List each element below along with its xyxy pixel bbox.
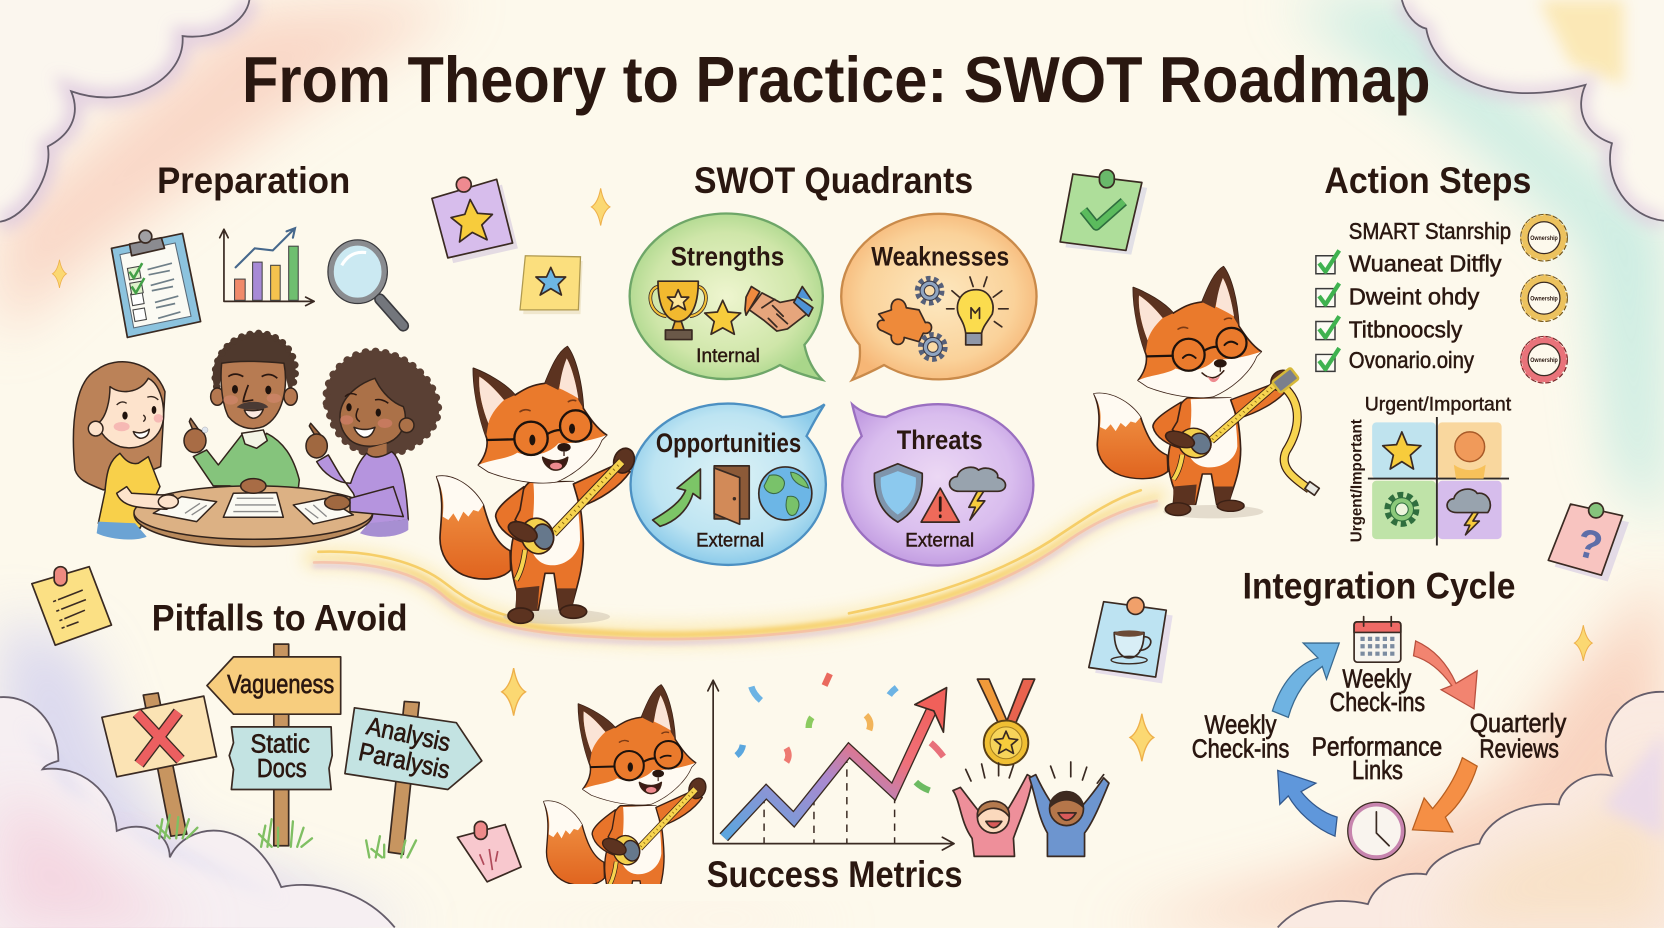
heading: swot quadrants: SWOT Quadrants bbox=[694, 159, 973, 201]
icon: star bbox=[705, 300, 741, 334]
badge: red bbox=[1521, 336, 1567, 383]
panel: preparation bbox=[73, 159, 438, 547]
icon: bar chart bbox=[220, 228, 314, 306]
icon: trophy bbox=[650, 281, 706, 340]
signpost: vagueness and static docs bbox=[207, 644, 341, 847]
panel: strengths bubble bbox=[630, 214, 823, 380]
person: girl bbox=[73, 362, 165, 540]
label: quarterly reviews: Reviews bbox=[1479, 736, 1559, 764]
panel: integration cycle bbox=[1192, 565, 1567, 860]
icon: calendar bbox=[1354, 617, 1401, 662]
arrow: red right bbox=[1414, 641, 1477, 709]
label: weekly check-ins top bbox=[1330, 666, 1425, 717]
badge: gold middle bbox=[1521, 275, 1567, 322]
signpost: vagueness and static docs: Docs bbox=[257, 755, 307, 783]
priority matrix bbox=[1349, 395, 1512, 545]
signpost: vagueness and static docs: Vagueness bbox=[227, 671, 334, 699]
heading: action steps: Action Steps bbox=[1324, 159, 1531, 201]
sticky note: blue coffee bbox=[1089, 597, 1173, 683]
checklist: SMART Stanrship bbox=[1349, 218, 1511, 244]
label: performance links: Performance bbox=[1312, 734, 1442, 762]
icon: warning triangle bbox=[921, 488, 959, 522]
label: weekly check-ins left: Weekly bbox=[1204, 711, 1277, 739]
icon: clock bbox=[1348, 802, 1405, 860]
label: quarterly reviews: Quarterly bbox=[1470, 710, 1567, 738]
illustration: team at table bbox=[73, 333, 438, 547]
label: performance links bbox=[1312, 734, 1442, 785]
icon: clipboard checklist bbox=[111, 230, 201, 337]
heading: integration cycle: Integration Cycle bbox=[1243, 565, 1515, 607]
checklist: Titbnoocsly bbox=[1349, 316, 1463, 342]
heading: pitfalls to avoid: Pitfalls to Avoid bbox=[152, 596, 408, 638]
label: internal: Internal bbox=[696, 346, 760, 367]
title: From Theory to Practice: SWOT Roadmap bbox=[242, 43, 1431, 116]
sticky note: pink question: ? bbox=[1572, 519, 1607, 569]
label: threats: Threats bbox=[897, 425, 983, 455]
checklist bbox=[1316, 218, 1511, 373]
arrow: blue up bbox=[1272, 643, 1339, 717]
icon: puzzle piece bbox=[877, 299, 932, 344]
label: weekly check-ins left: Check-ins bbox=[1192, 736, 1289, 764]
cloud: bottom right bbox=[1278, 692, 1664, 927]
icon: lightbulb bbox=[947, 277, 1008, 345]
person: woman bbox=[306, 352, 438, 537]
sticky note: purple star bbox=[432, 177, 518, 263]
signpost: x bbox=[102, 693, 217, 838]
label: external: External bbox=[905, 531, 974, 552]
icon: shield bbox=[874, 464, 922, 522]
tape end bbox=[1283, 386, 1310, 489]
icon: gear bottom bbox=[921, 335, 944, 359]
cloud: bottom left bbox=[0, 697, 395, 927]
heading: success metrics: Success Metrics bbox=[707, 853, 963, 895]
label: strengths: Strengths bbox=[671, 241, 784, 271]
icon: storm cloud bbox=[950, 467, 1006, 520]
label: weekly check-ins top: Check-ins bbox=[1330, 689, 1425, 717]
icon: magnifying glass bbox=[328, 240, 403, 326]
person: man bbox=[184, 333, 299, 492]
icon: gear top bbox=[918, 279, 941, 302]
label: weekly check-ins top: Weekly bbox=[1342, 666, 1412, 694]
priority matrix: Urgent/Important bbox=[1349, 418, 1366, 542]
icon: handshake bbox=[745, 287, 813, 331]
character: fox with tape, right bbox=[1094, 267, 1319, 518]
sticky note: yellow blue star bbox=[520, 256, 583, 314]
signpost: analysis paralysis: Analysis bbox=[364, 712, 453, 757]
cloud: top left bbox=[0, 0, 249, 222]
label: opportunities: Opportunities bbox=[656, 428, 801, 458]
label: weekly check-ins left bbox=[1192, 711, 1289, 764]
badge: gold middle: Ownership bbox=[1530, 295, 1558, 302]
checklist: Dweint ohdy bbox=[1349, 284, 1480, 310]
checklist: Ovonario.oiny bbox=[1349, 347, 1474, 373]
label: weaknesses: Weaknesses bbox=[871, 241, 1009, 271]
icon: globe bbox=[759, 467, 812, 520]
badge: gold top bbox=[1521, 214, 1567, 261]
path ribbon bbox=[314, 490, 1157, 642]
cloud: top right bbox=[1402, 0, 1664, 221]
badge: gold top: Ownership bbox=[1530, 235, 1558, 242]
confetti bbox=[736, 674, 943, 791]
sparkles bbox=[52, 188, 1592, 761]
icon: growth arrow bbox=[653, 469, 700, 526]
character: fox with tape, centre bbox=[437, 347, 638, 624]
signpost: analysis paralysis: Paralysis bbox=[356, 738, 452, 785]
sticky note: pink scribble bbox=[457, 821, 521, 882]
character: fox with tape, bottom bbox=[543, 684, 707, 884]
label: external: External bbox=[696, 531, 764, 552]
line chart bbox=[708, 680, 954, 850]
panel: pitfalls bbox=[102, 596, 482, 857]
icon: medal bbox=[977, 679, 1035, 765]
arrow: orange down bbox=[1412, 758, 1477, 832]
icon: door bbox=[714, 466, 749, 524]
panel: weaknesses bubble bbox=[841, 214, 1037, 380]
sticky note: green check bbox=[1060, 170, 1147, 255]
panel: action steps bbox=[1316, 159, 1567, 545]
label: performance links: Links bbox=[1352, 757, 1403, 785]
illustration: celebrating people bbox=[953, 762, 1109, 856]
sticky note: yellow list bbox=[32, 567, 111, 645]
signpost: analysis paralysis bbox=[345, 701, 482, 857]
label: quarterly reviews bbox=[1470, 710, 1567, 764]
priority matrix: Urgent/Important bbox=[1365, 395, 1512, 416]
signpost: vagueness and static docs: Static bbox=[250, 730, 310, 758]
panel: opportunities bubble bbox=[631, 404, 826, 565]
heading: preparation: Preparation bbox=[157, 159, 350, 201]
sticky note: pink question bbox=[1548, 503, 1629, 582]
table with papers bbox=[117, 479, 403, 547]
panel: threats bubble bbox=[842, 404, 1033, 565]
arrow: blue left bbox=[1278, 770, 1337, 836]
badge: red: Ownership bbox=[1530, 357, 1558, 364]
panel: success metrics bbox=[707, 674, 1109, 895]
checklist: Wuaneat Ditfly bbox=[1349, 251, 1502, 277]
